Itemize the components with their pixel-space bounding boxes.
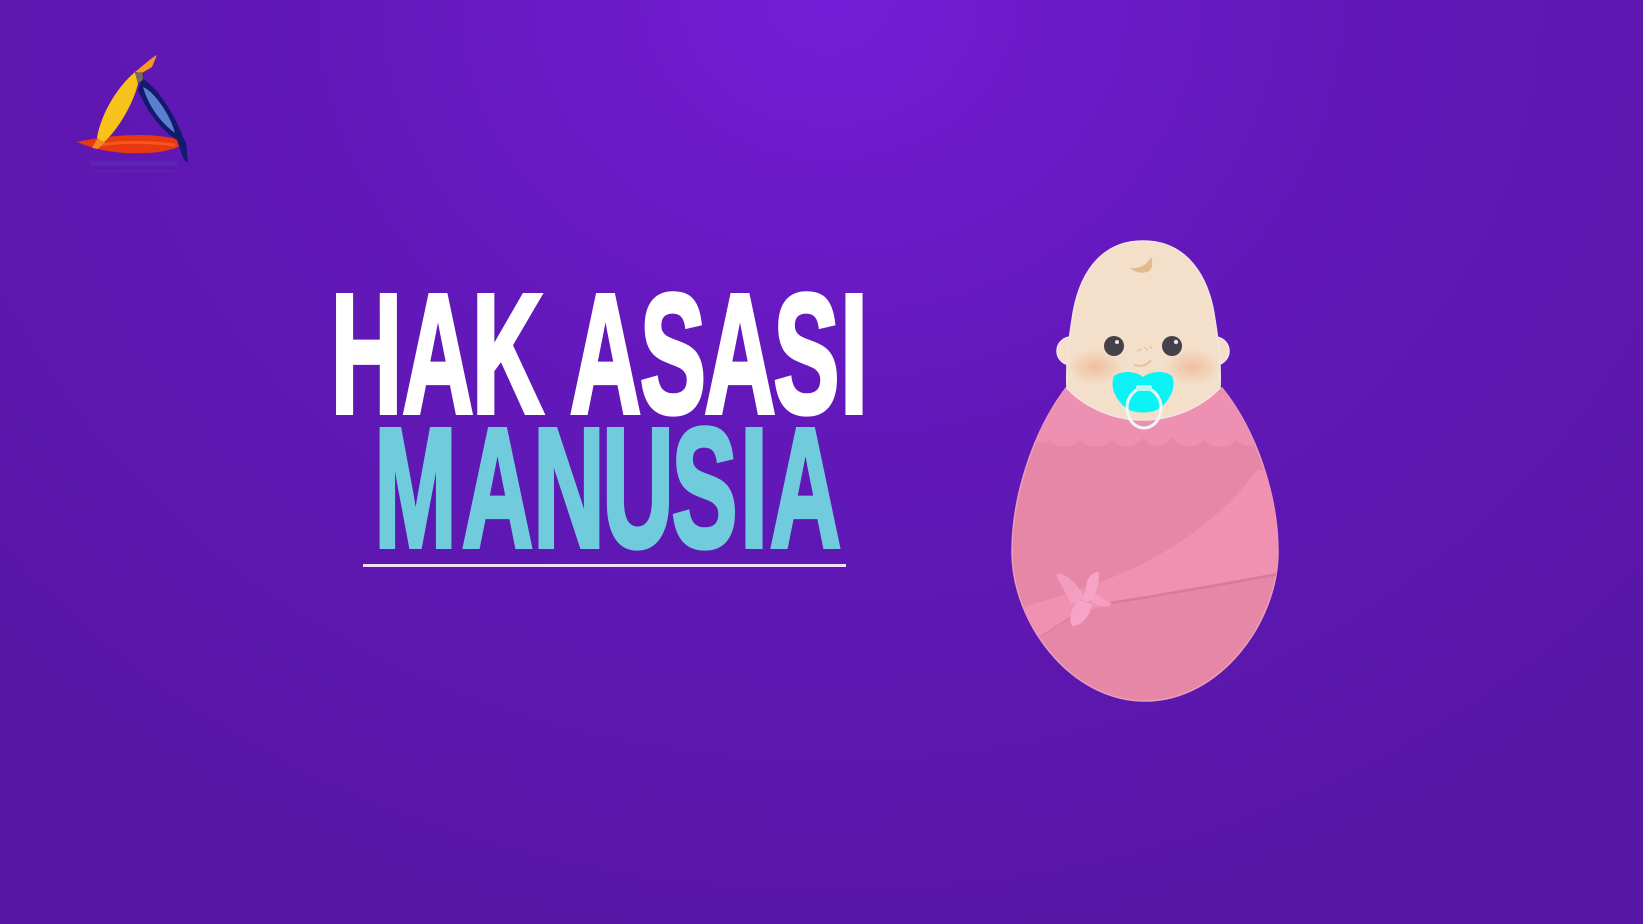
baby illustration bbox=[1012, 241, 1285, 701]
collar bbox=[1036, 388, 1255, 446]
blush left bbox=[1067, 349, 1123, 385]
logo bbox=[77, 55, 188, 172]
title line 1: HAK ASASI bbox=[331, 260, 868, 449]
red feather bbox=[77, 135, 184, 153]
swaddle body bbox=[1012, 388, 1278, 701]
nose bbox=[1137, 346, 1152, 351]
blush right bbox=[1164, 349, 1220, 385]
brush ferrule bbox=[135, 72, 143, 83]
blue feather bbox=[138, 78, 188, 163]
right eye bbox=[1162, 336, 1182, 356]
title line 2: MANUSIA bbox=[374, 394, 841, 583]
wrap line bbox=[1111, 574, 1278, 603]
yellow feather bbox=[97, 72, 138, 143]
head bbox=[1067, 241, 1220, 420]
title underline rule bbox=[363, 564, 846, 567]
pacifier bbox=[1112, 372, 1174, 412]
hair curl bbox=[1130, 257, 1152, 273]
wrap fold bbox=[1020, 470, 1285, 637]
left eye bbox=[1104, 336, 1124, 356]
faint logo caption bbox=[90, 161, 177, 166]
mouth bbox=[1134, 360, 1151, 366]
pacifier ring bbox=[1127, 388, 1161, 428]
bow bbox=[1056, 572, 1112, 626]
right ear bbox=[1201, 337, 1229, 365]
left ear bbox=[1057, 337, 1085, 365]
